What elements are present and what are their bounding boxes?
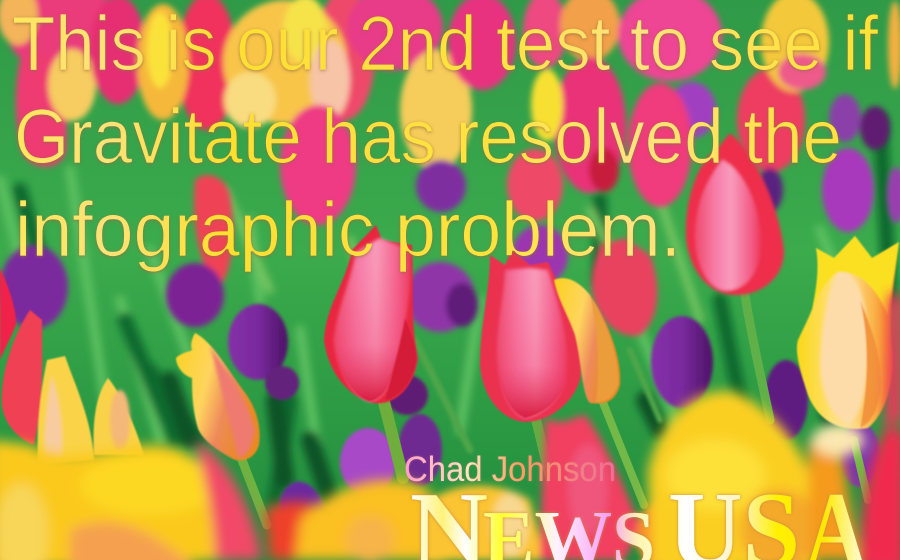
- tulip: centre-left pink in focus: [324, 225, 418, 403]
- foreground: blurred yellow tulips left: [0, 440, 445, 560]
- headline: three lines of text: infographic problem.: [15, 187, 681, 273]
- tulip: right yellow in focus: [797, 236, 899, 429]
- tulip: right mid-blur pink: [686, 133, 784, 295]
- tulips: left edge red and yellow: [0, 268, 144, 465]
- logo: News USA wordmark: [410, 471, 867, 560]
- blurred tulips: far background row: [0, 0, 900, 336]
- headline: three lines of text: [12, 1, 879, 273]
- headline: three lines of text: Gravitate has resolved the: [14, 94, 842, 180]
- stems: [242, 295, 868, 525]
- tulip: centre yellow-orange bud: [554, 278, 620, 404]
- tulip: left purple buds: [228, 304, 880, 512]
- foreground: blurred yellow and red tulips right: [648, 293, 900, 560]
- tulip: centre pink in focus: [480, 250, 581, 422]
- byline: Chad Johnson: Chad Johnson: [404, 450, 616, 489]
- foreground: blurred middle tulip band: [425, 415, 704, 560]
- tulip: left yellow bud: [176, 333, 260, 460]
